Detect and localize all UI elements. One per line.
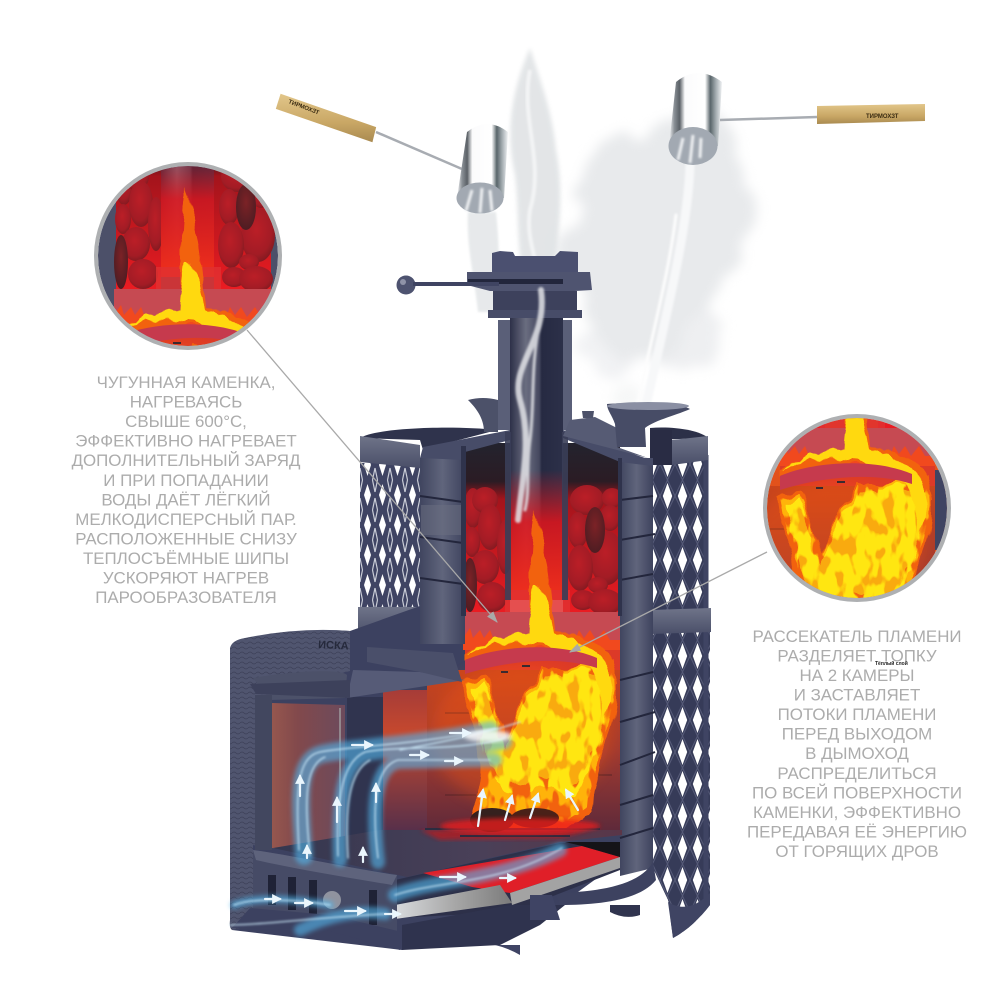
caption: stones: УСКОРЯЮТ НАГРЕВ [103,568,269,588]
caption: stones: МЕЛКОДИСПЕРСНЫЙ ПАР. [75,510,297,529]
caption: stones: И ПРИ ПОПАДАНИИ [103,471,269,490]
regulator knob [323,891,341,909]
caption: flame divider [747,627,967,861]
water stream: left ladle [468,212,499,312]
ash drawer [395,842,620,919]
flame: outer orange [462,510,618,831]
pipe smoke wisps [518,290,542,520]
caption: flame divider: РАСПРЕДЕЛИТЬСЯ [777,764,937,783]
ladle: right: ТИРМОХЗТ [866,114,899,120]
caption: flame divider: ПЕРЕДАВАЯ ЕЁ ЭНЕРГИЮ [747,822,967,842]
caption: stones: РАСПОЛОЖЕННЫЕ СНИЗУ [75,530,297,548]
caption: stones: СВЫШЕ 600°С, [125,412,247,431]
flame: yellow lace [466,664,616,824]
caption: stones: ДОПОЛНИТЕЛЬНЫЙ ЗАРЯД [72,451,301,470]
leader line: stones [247,330,497,622]
firebox floor plate and grate [273,829,622,877]
caption: flame divider: РАССЕКАТЕЛЬ ПЛАМЕНИ [752,627,962,646]
caption: stones: ТЕПЛОСЪЁМНЫЕ ШИПЫ [83,549,289,568]
top shelf [347,647,465,698]
caption: flame divider: В ДЫМОХОД [805,744,909,763]
ladle: right [668,73,925,165]
caption: flame divider: РАЗДЕЛЯЕТ ТОПКУ [777,646,937,666]
flame divider [465,647,597,674]
caption: stones: НАГРЕВАЯСЬ [130,392,242,412]
caption: flame divider: И ЗАСТАВЛЯЕТ [794,686,920,704]
callout circle: hot stones [94,162,282,350]
flame: solid yellow column [468,581,613,722]
caption: stones: ВОДЫ ДАЁТ ЛЁГКИЙ [101,490,271,510]
stove upper walls [420,430,655,645]
door brand: ИСКА [318,639,349,653]
caption: stones: ПАРООБРАЗОВАТЕЛЯ [95,588,277,607]
stove body backing [230,606,622,950]
mesh guard: upper left [358,463,420,650]
firebox side column and base [555,640,656,917]
firebox interior left walls and glass [272,690,427,858]
caption: stones [72,373,301,607]
steam cloud [558,110,755,413]
caption: flame divider: ОТ ГОРЯЩИХ ДРОВ [775,842,939,861]
steam plume [510,48,560,295]
air flow: blue streams [230,722,578,930]
caption: flame divider: ПЕРЕД ВЫХОДОМ [782,724,932,744]
flue top with damper [396,251,592,318]
leader line: divider [570,552,767,652]
interior: chamber, stones, pipe and flame [427,287,624,831]
caption: flame divider: ПОТОКИ ПЛАМЕНИ [778,705,936,724]
caption: stones: ЧУГУННАЯ КАМЕНКА, [97,373,275,392]
top rim rings [360,427,708,468]
caption: flame divider: НА 2 КАМЕРЫ [800,666,914,685]
arrows [265,733,578,914]
mesh guard: upper and lower right [650,452,711,938]
door lower grate panel [230,850,565,955]
funnels [468,398,690,458]
door plate [230,630,350,930]
caption: stones: ЭФФЕКТИВНО НАГРЕВАЕТ [75,432,297,450]
tiny stray label: Тёплый слой [875,660,908,667]
caption: flame divider: ПО ВСЕЙ ПОВЕРХНОСТИ [752,784,962,802]
ladle: left: ТИРМОХЗТ [287,99,320,117]
caption: flame divider: КАМЕНКИ, ЭФФЕКТИВНО [753,803,961,822]
burning logs [440,808,600,834]
ladle: left [276,92,508,214]
callout circle: flame divider [763,414,951,602]
water stream: right ladle [638,165,690,410]
